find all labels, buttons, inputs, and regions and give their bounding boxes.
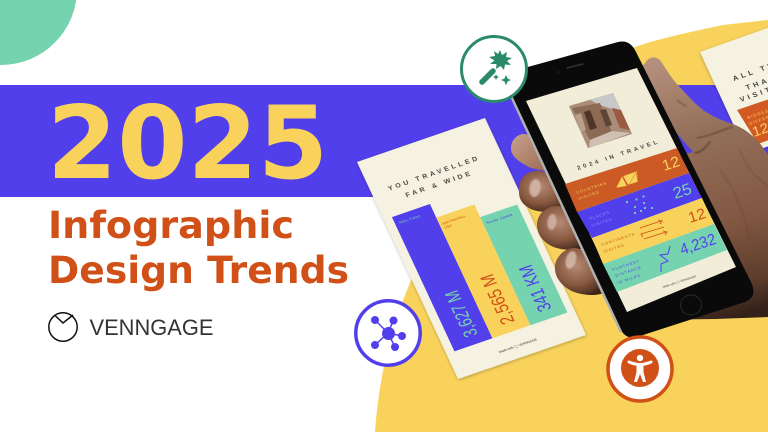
speaker and camera: [558, 64, 583, 72]
card heading: YOU TRAVELLED: [387, 155, 482, 193]
row: places: VISITED: [590, 217, 613, 228]
row: countries: COUNTRIES: [575, 180, 608, 195]
title: 2025: 2025: [47, 84, 328, 202]
row: distance: DISTANCE: [614, 265, 642, 278]
row: continents: 12: [686, 205, 708, 227]
card heading: FAR & WIDE: [405, 170, 474, 199]
phone screen: [526, 68, 736, 312]
bar: San Francisco: San Francisco,: [442, 214, 467, 226]
screen footer: Made with ◯ VENNGAGE: [662, 274, 697, 289]
row: distance: [603, 224, 727, 292]
left card: you travelled far and wide: [357, 118, 586, 379]
row: places: [577, 173, 702, 238]
bar: Toronto: [480, 204, 567, 325]
row: continents: VISITED: [602, 243, 625, 254]
bar: Toronto: Toronto, Canada: [486, 213, 513, 225]
subtitle: Infographic: [48, 204, 294, 247]
row: places: 25: [671, 180, 694, 203]
row: distance: 4,232: [678, 230, 718, 259]
bar: Paris: Paris, France: [399, 214, 421, 225]
row: continents: [592, 198, 714, 264]
bar: Toronto: 341 KM: [514, 262, 556, 315]
screen heading: 2024 IN TRAVEL: [576, 139, 661, 172]
home button: [680, 295, 702, 315]
right card: [700, 20, 768, 154]
row: countries: 12: [660, 153, 682, 175]
bar: San Francisco: 2,565 M: [476, 271, 519, 327]
icon: network: [356, 301, 420, 365]
bar: San Francisco: USA: [444, 223, 453, 230]
yellow blob: [375, 20, 768, 432]
row: distance: IN MILES: [616, 273, 642, 285]
venngage logo: VENNGAGE: [90, 315, 214, 340]
subtitle: [48, 204, 349, 292]
teal corner shape: [0, 0, 77, 65]
row: distance: FURTHEST: [611, 258, 641, 272]
icon: magic wand: [462, 36, 526, 102]
trevi fountain photo: [569, 93, 632, 148]
row: places: PLACES: [588, 210, 611, 221]
subtitle: Design Trends: [48, 249, 349, 292]
bar: Paris: 3,627 M: [440, 288, 482, 340]
bar: San Francisco: [436, 205, 530, 338]
icon: accessibility: [608, 337, 672, 401]
row: countries: VISITED: [577, 190, 600, 201]
bar: Paris: [392, 204, 492, 351]
phone: [504, 41, 753, 338]
row: continents: CONTINENTS: [600, 231, 636, 247]
hand: [511, 57, 768, 320]
row: countries: [565, 148, 689, 212]
venngage logo: [49, 313, 213, 341]
purple band: [0, 85, 768, 197]
made with venngage: Made with ◯ VENNGAGE: [498, 337, 538, 354]
fingers: [511, 134, 606, 295]
